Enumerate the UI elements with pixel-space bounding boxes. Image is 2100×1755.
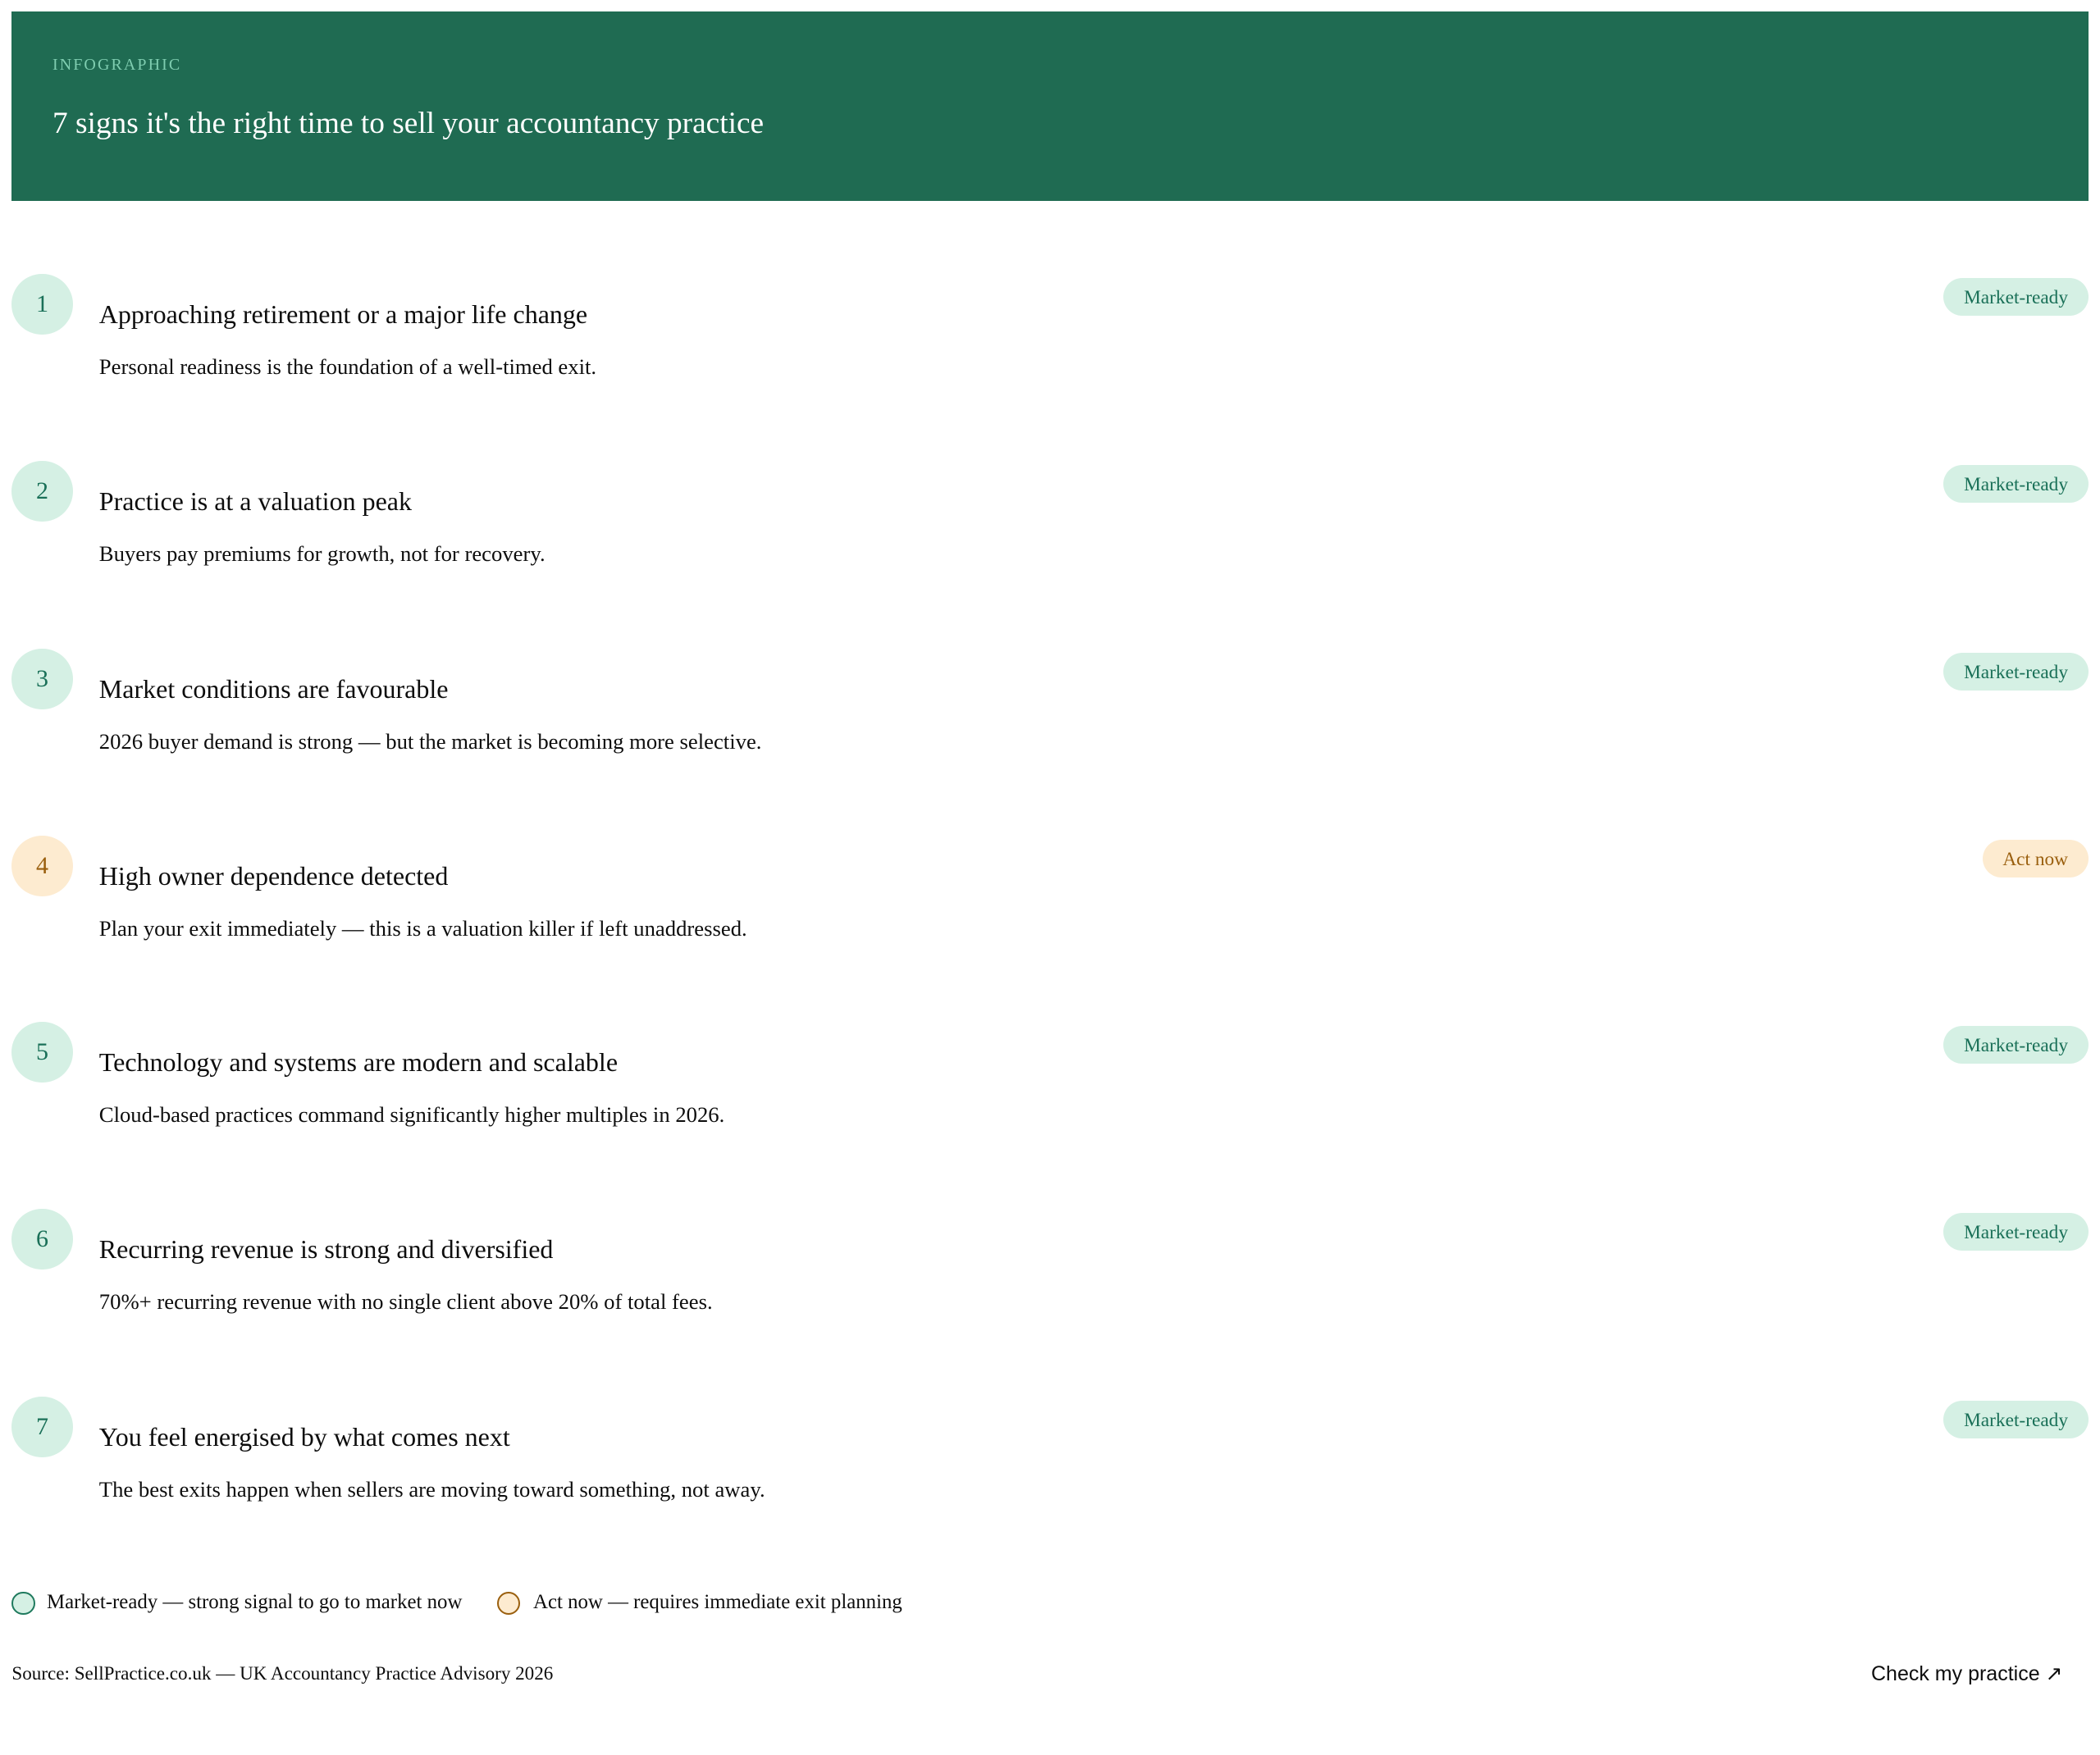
sign 7 description: The best exits happen when sellers are moving toward something, not away. [99,1477,765,1502]
sign 5 heading: Technology and systems are modern and scalable [99,1047,618,1077]
sign 7 heading: You feel energised by what comes next [99,1422,510,1452]
number badge 2 [11,461,73,522]
sign 1 description: Personal readiness is the foundation of a well-timed exit. [99,354,596,379]
sign 3 row [11,649,2089,754]
sign 5 description: Cloud-based practices command significantly higher multiples in 2026. [99,1102,724,1127]
number badge 3 [11,649,73,709]
status pill: market-ready: Market-ready [1964,474,2068,495]
number badge 1 [11,274,73,335]
call to action link: Check my practice ↗ [1871,1662,2063,1685]
sign 7 row [11,1397,2089,1502]
number badge 5: 5 [36,1038,48,1065]
status pill: market-ready [1943,465,2089,503]
sign 5 row [11,1022,2089,1127]
sign 1 row [11,274,2089,379]
number badge 6 [11,1209,73,1270]
legend swatch: market-ready [11,1592,35,1615]
number badge 6: 6 [36,1225,48,1252]
status pill: market-ready: Market-ready [1964,287,2068,308]
sign 3 heading: Market conditions are favourable [99,674,448,704]
status pill: market-ready: Market-ready [1964,1410,2068,1431]
sign 4 heading: High owner dependence detected [99,861,448,891]
sign 4 row [11,836,2089,941]
number badge 2: 2 [36,477,48,504]
sign 2 heading: Practice is at a valuation peak [99,486,412,516]
number badge 7: 7 [36,1413,48,1440]
number badge 4: 4 [36,852,48,879]
status pill: act now: Act now [2002,849,2068,870]
sign 1 heading: Approaching retirement or a major life change [99,299,587,329]
status pill: market-ready: Market-ready [1964,1035,2068,1056]
source note: Source: SellPractice.co.uk — UK Accountancy Practice Advisory 2026 [11,1662,553,1684]
number badge 4 [11,836,73,896]
status pill: market-ready [1943,1026,2089,1064]
number badge 1: 1 [36,290,48,317]
sign 4 description: Plan your exit immediately — this is a valuation killer if left unaddressed. [99,916,747,941]
legend text: act now: Act now — requires immediate exit planning [533,1591,902,1613]
number badge 3: 3 [36,665,48,692]
eyebrow label: INFOGRAPHIC [52,56,181,74]
status pill: market-ready: Market-ready [1964,662,2068,683]
number badge 7 [11,1397,73,1457]
sign 2 row [11,461,2089,566]
sign 2 description: Buyers pay premiums for growth, not for recovery. [99,541,546,566]
number badge 5 [11,1022,73,1083]
title: 7 signs it's the right time to sell your accountancy practice [52,107,764,140]
sign 6 description: 70%+ recurring revenue with no single client above 20% of total fees. [99,1289,713,1314]
sign 3 description: 2026 buyer demand is strong — but the market is becoming more selective. [99,729,761,754]
sign 6 row [11,1209,2089,1314]
status pill: act now [1983,840,2089,878]
status pill: market-ready [1943,653,2089,691]
status pill: market-ready: Market-ready [1964,1222,2068,1243]
header banner [11,11,2089,201]
status pill: market-ready [1943,278,2089,316]
legend text: market-ready: Market-ready — strong signal to go to market now [47,1591,462,1613]
status pill: market-ready [1943,1401,2089,1438]
legend swatch: act now [497,1592,520,1615]
sign 6 heading: Recurring revenue is strong and diversified [99,1234,553,1264]
status pill: market-ready [1943,1213,2089,1251]
